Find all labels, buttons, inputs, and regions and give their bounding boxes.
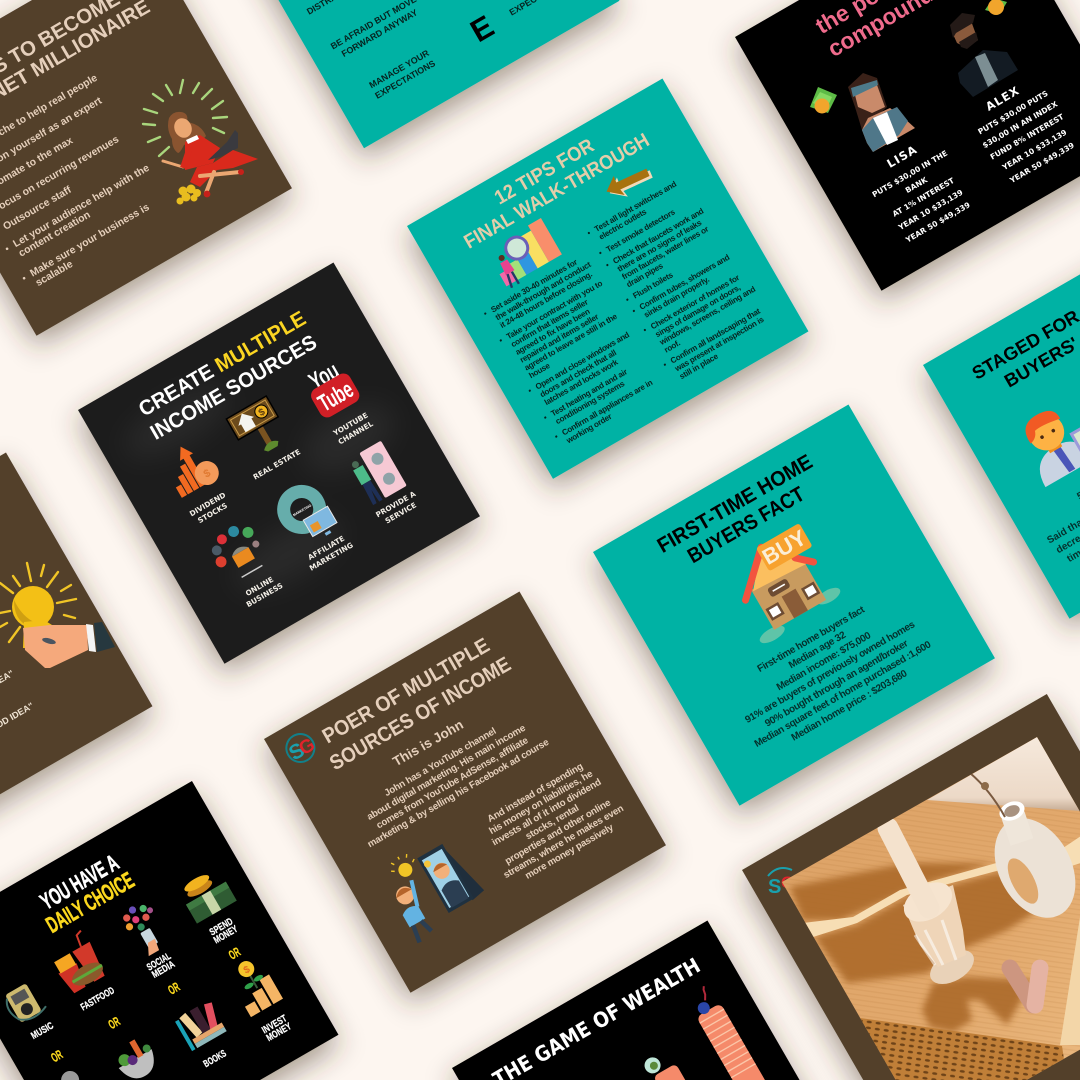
heading: 12 tips: FINAL WALK-THROUGH [460,129,653,253]
labels: top row [29,915,240,1049]
paragraph: investing: his money on liabilities, he [487,768,595,837]
text: Alex: YEAR 50 $49,339 [1007,141,1076,185]
logo: SG: S [285,738,309,765]
icon: affiliate marketing ring: MARKETING [292,503,312,517]
heading: poer of multiple sources: POER OF MULTIPLE [318,634,494,748]
paragraph: investing: invests all of it into dividend [490,777,603,848]
bullet list: steps: Make sure your business is [29,202,152,279]
bullet list: right column: roof. [663,338,682,355]
bullet list: left column: Open and close windows and [534,330,631,391]
text: home buyer facts: Median income: $75,000 [775,630,873,693]
bullet list: left column: Set aside 30-40 minutes for [489,257,580,314]
label: provide a service: SERVICE [383,500,418,525]
text: Lisa: LISA [884,142,920,171]
icon: books [174,999,228,1051]
bullet list: right column: Confirm tubes, showers and [638,253,731,312]
icon: fast food [45,930,108,995]
bullet list: steps: Outsource staff [2,184,74,233]
bullet list: left column: Test heating and and air [549,367,630,418]
icon: Lisa avatar [848,73,915,152]
bullet list: steps: scalable [34,259,75,289]
panel: staged for buyers [923,218,1080,619]
panel: power of multiple sources [264,592,666,993]
labels: top row: MUSIC [29,1020,56,1042]
paragraph: John intro: comes from YouTube AdSense, affiliate [375,735,531,831]
icon: invest money plant [225,954,283,1017]
labels: or separators: OR [226,944,243,963]
text: Lisa: YEAR 10 $33,139 [896,188,964,232]
bullet list: left column: latches and locks work [543,357,620,407]
panel: first-time home buyers [593,404,995,806]
bullet list: right column: still in place [678,351,720,381]
logo: SG: G [296,734,319,760]
text: left column [305,0,451,109]
heading: daily choice: DAILY CHOICE [41,867,138,938]
heading: create multiple income sources: INCOME SOURCES [147,331,321,445]
text: home buyer facts: First-time home buyers fact [756,604,867,675]
icon: arrow [602,159,656,205]
paragraph: investing: properties and other online [503,797,613,867]
icon: invest money plant: $ [242,964,253,976]
text: Alex: $30,00 IN AN INDEX [981,99,1059,150]
text: left column: FORWARD ANYWAY [340,7,419,59]
chalk texture [114,308,439,620]
label: dividend stocks: DIVIDEND [188,490,227,518]
bullet list: right column: electric outlets [597,207,649,242]
labels: or separators: OR [48,1047,66,1065]
icon: online business [204,518,271,586]
photo: candle and vase still life [770,720,1080,1080]
bullet list: left column [482,252,664,449]
text: staging stat [1034,456,1080,569]
icon: YouTube logo: Tube [314,376,358,417]
label: affiliate marketing: AFFILIATE [306,534,346,562]
bullet list: left column: repaired and items seller [518,312,601,365]
heading: staged for buyers: BUYERS' [1001,333,1080,392]
text: home buyer facts: Median age 32 [787,629,848,671]
bullet list: steps: Let your audience help with the [12,163,152,250]
bullet list: right column: sings of damage on doors, [654,283,742,339]
heading: first-time home buyers fact: BUYERS FACT [684,483,809,568]
text: Lisa: PUTS $30,00 IN THE [871,149,949,199]
text: Lisa [860,130,977,248]
labels: or separators: OR [165,979,183,998]
bullet list: right column: from faucets, water lines or [620,224,711,281]
text: Lisa: AT 1% INTEREST [891,176,957,219]
text: Alex [964,70,1080,188]
panel: game of wealth [452,920,854,1080]
icon: hand holding light bulb [0,563,115,668]
text: left column: EXPECTATIONS [373,58,437,101]
text: Alex: YEAR 10 $33,139 [1000,128,1068,172]
icon: chart and person [485,218,564,290]
heading: 12 tips: 12 TIPS FOR [491,135,598,209]
icon: woman meditating with laptop [143,80,258,204]
text: home buyer facts [721,584,940,761]
paragraph: investing: stocks, rental [524,803,581,842]
paragraph: John intro: John has a YouTube channel [383,726,498,799]
icon: microphone [58,1068,82,1080]
object: onyx candle holder [903,882,974,984]
label: dividend stocks: STOCKS [196,501,229,525]
heading: first-time home buyers fact: FIRST-TIME HOME [654,450,817,558]
heading: staged for buyers: STAGED FOR [968,305,1080,384]
panel: compounding [735,0,1080,291]
label: online business: ONLINE [244,575,275,598]
icon: music player [2,980,48,1026]
logo: SG partial: G [781,873,794,892]
icon: tall coin stack [685,983,820,1080]
bullet list: left column: conditioning systems [554,379,627,426]
card frame [742,694,1080,1080]
panel: photo card [742,694,1080,1080]
logo: SG [281,729,320,767]
labels: top row: MONEY [212,924,240,946]
icon: YouTube logo [298,353,362,420]
bullet list: right column: was present at inspection is [673,315,766,374]
bullet list: left column: working order [564,411,614,446]
label: YouTube channel: CHANNEL [336,419,375,446]
bullet list: steps: content creation [17,210,93,260]
bullet list: left column: Confirm all appliances are in [560,378,654,437]
bullet list: right column: sinks drain properly. [642,275,711,320]
text: Alex: ALEX [983,83,1022,114]
bullet list: left column: it 24-48 hours before closing. [498,270,594,330]
bullet list: left column: doors and check that all [538,348,618,399]
icon: cash and coins [177,866,237,924]
bullet list: right column: there are no signs of leaks [616,218,704,274]
icon: house with buy sign [719,522,845,647]
icon: small coin stack with globe [642,1048,706,1080]
bullet list: left column: house [527,361,552,380]
panel: 12 tips [407,78,808,479]
label: real estate: REAL ESTATE [252,447,302,482]
bullet list: left column: agreed to leave are still in the [523,312,619,372]
heading: poer of multiple sources: SOURCES OF INCOME [326,653,515,775]
text: Alex: FUND 8% INTEREST [989,112,1066,162]
text: Lisa: BANK [904,175,930,195]
icon: real estate sign [226,396,291,461]
label: invest money: MONEY [265,1021,294,1044]
paragraph: investing [473,754,632,891]
object: heart candle [1010,968,1040,1005]
text: Alex: PUTS $30,00 PUTS [976,89,1050,136]
bullet list: left column: the walk-through and conduct [494,260,593,322]
object: ring vase [970,774,1076,918]
label: affiliate marketing: MARKETING [308,540,355,573]
labels: top row: SPEND [208,916,235,938]
icon: real estate sign: $ [257,406,268,419]
bullet list: right column: windows, screens, ceiling and [657,285,757,347]
bullet list: steps [0,73,174,294]
panel: top teal card [218,0,619,148]
icon: businessman with mirror [376,828,491,943]
icon: affiliate marketing ring [277,482,340,549]
icon: house with buy sign: BUY [758,525,811,570]
labels: or separators: OR [106,1013,123,1032]
heading: daily choice [30,847,138,938]
letter E: E [464,8,500,49]
panel: good idea bad idea [0,452,152,854]
bullet list: left column: agreed to fix have been [514,307,592,357]
label: invest money: INVEST [260,1013,289,1036]
heading: daily choice: YOU HAVE A [36,849,123,915]
label: provide a service: PROVIDE A [374,489,417,519]
bullet list: right column: Test all light switches and [593,179,678,234]
labels: top row: MEDIA [150,959,177,981]
bullet list: left column: Take your contract with you to [505,279,604,341]
bullet list: left column: confirm that items seller [509,297,590,349]
paragraph: investing: more money passively [523,822,616,882]
paragraph: John intro: marketing & by selling his Facebook ad course [366,737,552,850]
paragraph: John intro: about digital marketing. His main income [365,722,528,823]
panel: internet millionaire [0,0,292,336]
icon: dividend stocks [159,436,223,500]
bullet list: right column: Test smoke detectors [605,207,677,254]
bullet list: right column: Check that faucets work and [611,206,705,266]
text: Lisa: YEAR 50 $49,339 [903,200,972,245]
label: online business: BUSINESS [245,581,284,609]
labels: or separators [48,944,243,1065]
labels: top row: FASTFOOD [79,985,117,1013]
paragraph: investing: streams, where he makes even [502,803,626,881]
icon: YouTube logo: You [304,357,344,396]
icon: Alex avatar [950,13,1018,97]
text: home buyer facts: Median square feet of home purchased :1,600 [753,639,934,750]
label: YouTube channel: YOUTUBE [332,411,370,438]
icon: salad [110,1034,162,1080]
label: invest money [260,1013,294,1044]
icon: money left [810,87,837,114]
bullet list: right column [586,171,777,385]
card background [0,0,292,336]
text: home buyer facts: Median home price : $203,680 [790,668,910,744]
bullet list: right column: Check exterior of homes for [649,273,742,331]
label: books: BOOKS [202,1048,229,1070]
text: left column: MANAGE YOUR [367,48,431,90]
icon: dividend stocks: $ [202,467,213,481]
paragraph: investing: And instead of spending [486,761,585,825]
card background [0,452,152,854]
labels: top row: SOCIAL [145,951,173,973]
icon: money right [985,0,1007,15]
panel: create multiple income sources [78,262,480,664]
object: candle [888,828,929,908]
bullet list: right column: Confirm all landscaping that [669,306,762,365]
text: idea quotes [0,668,35,741]
heading: create multiple income sources: CREATE MULTIPLE [135,307,310,421]
logo: SG partial: S [768,876,781,898]
bullet list: right column: drain pipes [625,261,665,289]
text: home buyer facts: 90% bought through an agent/broker [763,638,910,729]
card background [735,0,1080,291]
panel: daily choice [0,781,338,1080]
text: home buyer facts: 91% are buyers of previously owned homes [743,619,917,726]
icon: man with sign [1012,377,1080,487]
icon: service provider [347,441,407,505]
logo: SG partial [768,868,794,898]
icon: social media [118,898,172,959]
subheading: this is John: This is John [390,717,466,769]
bullet list: right column: Flush toilets [631,270,675,301]
